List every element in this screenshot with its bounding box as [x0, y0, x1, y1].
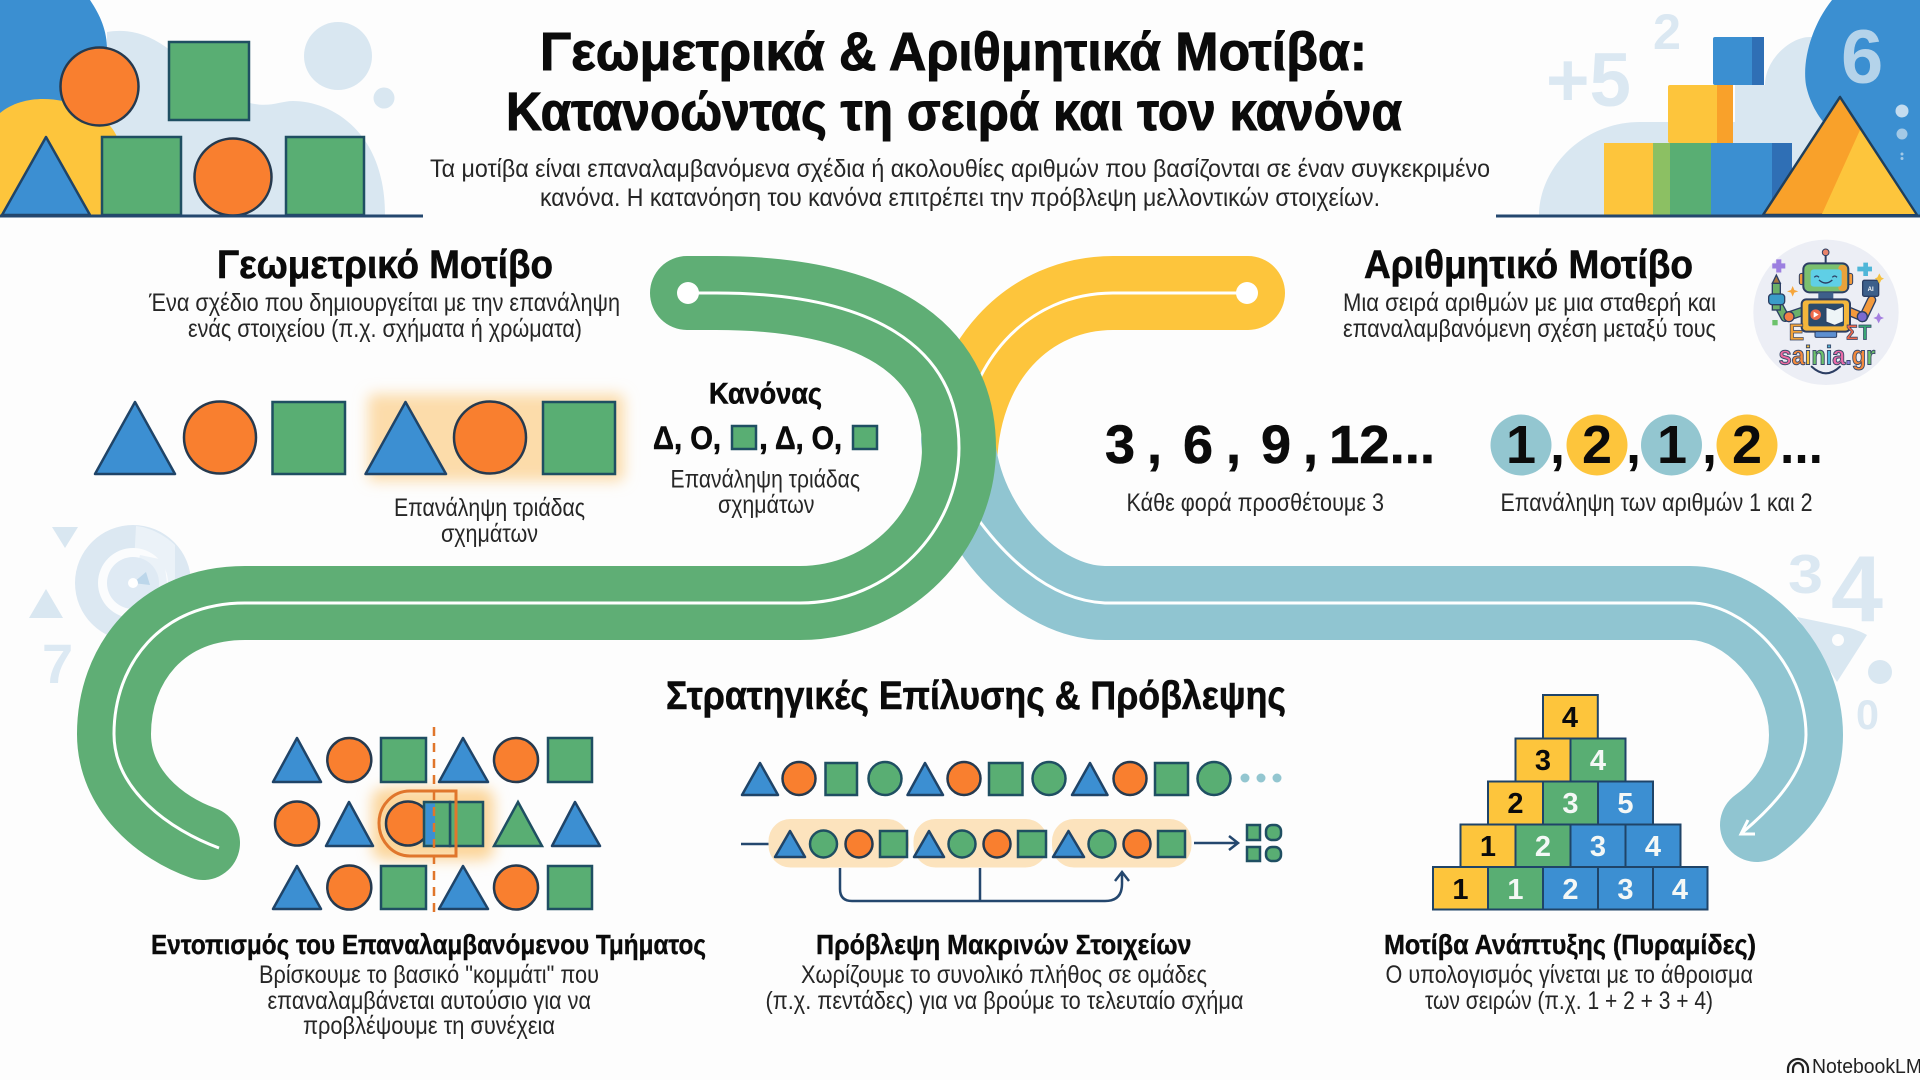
decoration: faded numbers right: 4	[1831, 536, 1883, 641]
sequence: repeating one two: 1	[1657, 415, 1687, 475]
heading: arithmetic pattern: Αριθμητικό Μοτίβο	[1364, 243, 1693, 287]
logo: robot sainia.gr: Τ	[1859, 320, 1871, 344]
chart: number pyramid: 3	[1562, 788, 1579, 820]
text: locate repeating segment: Βρίσκουμε το βασικό "κομμάτι" που	[259, 961, 599, 989]
logo: robot sainia.gr: Ε	[1789, 319, 1804, 345]
sequence: add three: 9	[1261, 415, 1291, 475]
intro text: κανόνα. Η κατανόηση του κανόνα επιτρέπει την πρόβλεψη μελλοντικών στοιχείων.	[540, 184, 1380, 212]
sequence: repeating one two: ,	[1550, 415, 1565, 475]
sequence: add three: ,	[1226, 415, 1241, 475]
chart: number pyramid: 4	[1672, 874, 1688, 906]
text: locate repeating segment	[151, 929, 706, 1040]
text: arithmetic description: Μια σειρά αριθμών με μια σταθερή και	[1343, 289, 1716, 317]
logo: robot sainia.gr: Σ	[1846, 320, 1858, 344]
chart: number pyramid: 4	[1645, 831, 1661, 863]
text: predicting far elements: Χωρίζουμε το συνολικό πλήθος σε ομάδες	[801, 961, 1207, 989]
figure: long sequence row	[742, 762, 1282, 795]
decoration: faded numbers right: 0	[1856, 691, 1879, 738]
track: yellow arithmetic path	[960, 282, 1258, 470]
text: arithmetic description	[1343, 289, 1716, 343]
rule block: Δ, Ο,	[775, 420, 842, 456]
caption: triad repetition	[394, 494, 585, 548]
text: predicting far elements: (π.χ. πεντάδες) για να βρούμε το τελευταίο σχήμα	[766, 987, 1244, 1015]
text: locate repeating segment: επαναλαμβάνεται αυτούσιο για να	[268, 987, 591, 1015]
chart: number pyramid	[1433, 695, 1708, 910]
sequence: repeating one two: ...	[1780, 415, 1823, 475]
text: arithmetic description: επαναλαμβανόμενη σχέση μεταξύ τους	[1343, 315, 1716, 343]
illustration: header blocks right: +5	[1546, 38, 1631, 123]
figure: shape grid with highlighted segment	[273, 727, 600, 918]
illustration: header blocks right: 6	[1841, 15, 1883, 100]
illustration: header shapes left	[0, 0, 423, 218]
caption: triad repetition: σχημάτων	[441, 520, 538, 548]
chart: number pyramid: 2	[1507, 788, 1524, 820]
chart: number pyramid: 2	[1562, 874, 1579, 906]
track: teal path with arrow	[958, 440, 1806, 834]
sequence: add three	[1105, 415, 1435, 475]
rule block	[653, 378, 877, 519]
sequence: add three: 12...	[1329, 415, 1435, 475]
sequence: add three: ,	[1147, 415, 1162, 475]
illustration: header blocks right	[1496, 0, 1920, 218]
rule block: ,	[759, 420, 768, 456]
geometric pattern row	[95, 394, 624, 481]
chart: number pyramid: 3	[1617, 874, 1634, 906]
rule block: σχημάτων	[718, 491, 814, 519]
caption: repeating one two: Επανάληψη των αριθμών 1 και 2	[1500, 489, 1812, 517]
text: predicting far elements	[766, 929, 1244, 1015]
decoration: faded numbers right	[1788, 536, 1892, 738]
caption: triad repetition: Επανάληψη τριάδας	[394, 494, 585, 522]
title: Γεωμετρικά & Αριθμητικά Μοτίβα:	[540, 22, 1367, 82]
title	[506, 22, 1402, 142]
chart: number pyramid: 5	[1617, 788, 1634, 820]
chart: number pyramid: 3	[1590, 831, 1606, 863]
illustration: header blocks right: 2	[1653, 4, 1681, 60]
heading: strategies: Στρατηγικές Επίλυσης & Πρόβλεψης	[666, 674, 1286, 718]
intro text: Τα μοτίβα είναι επαναλαμβανόμενα σχέδια ή ακολουθίες αριθμών που βασίζονται σε έναν συγκεκριμένο	[430, 155, 1490, 183]
rule block: Κανόνας	[709, 378, 822, 410]
chart: number pyramid: 4	[1562, 702, 1578, 734]
sequence: repeating one two: 2	[1732, 415, 1762, 475]
sequence: add three: 6	[1183, 415, 1213, 475]
chart: number pyramid: 3	[1535, 745, 1551, 777]
logo: robot sainia.gr: AI	[1868, 287, 1874, 293]
decoration: faded target left: 7	[42, 632, 73, 695]
decoration: faded numbers right: 3	[1788, 543, 1823, 605]
text: growth patterns: Ο υπολογισμός γίνεται με το άθροισμα	[1386, 961, 1753, 989]
chart: number pyramid: 4	[1590, 745, 1606, 777]
logo: robot sainia.gr	[1753, 240, 1899, 385]
text: growth patterns	[1384, 929, 1756, 1015]
chart: number pyramid: 1	[1452, 874, 1469, 906]
decoration: faded target left	[29, 525, 191, 695]
caption: add three: Κάθε φορά προσθέτουμε 3	[1126, 489, 1384, 517]
chart: number pyramid: 2	[1535, 831, 1551, 863]
figure: grouped sequence with bracket	[741, 819, 1281, 901]
text: predicting far elements: Πρόβλεψη Μακρινών Στοιχείων	[816, 929, 1192, 960]
text: geometric description: Ένα σχέδιο που δημιουργείται με την επανάληψη	[148, 289, 620, 317]
sequence: repeating one two: ,	[1626, 415, 1641, 475]
track: green geometric path	[114, 282, 959, 848]
rule block: Επανάληψη τριάδας	[670, 466, 860, 494]
sequence: repeating one two	[1490, 414, 1823, 476]
text: growth patterns: των σειρών (π.χ. 1 + 2 + 3 + 4)	[1425, 987, 1713, 1015]
title: Κατανοώντας τη σειρά και τον κανόνα	[506, 82, 1402, 142]
sequence: add three: ,	[1303, 415, 1318, 475]
heading: geometric pattern: Γεωμετρικό Μοτίβο	[217, 243, 553, 287]
text: geometric description	[148, 289, 620, 343]
logo: robot sainia.gr: sainia.gr	[1779, 341, 1875, 371]
text: locate repeating segment: Εντοπισμός του Επαναλαμβανόμενου Τμήματος	[151, 929, 706, 960]
text: geometric description: ενάς στοιχείου (π.χ. σχήματα ή χρώματα)	[188, 315, 582, 343]
intro text	[430, 155, 1490, 212]
sequence: repeating one two: ,	[1702, 415, 1717, 475]
sequence: add three: 3	[1105, 415, 1135, 475]
chart: number pyramid: 1	[1507, 874, 1524, 906]
sequence: repeating one two: 2	[1582, 415, 1612, 475]
text: locate repeating segment: προβλέψουμε τη συνέχεια	[303, 1012, 555, 1040]
text: growth patterns: Μοτίβα Ανάπτυξης (Πυραμίδες)	[1384, 929, 1756, 960]
rule block: Δ, Ο,	[653, 420, 721, 456]
sequence: repeating one two: 1	[1506, 415, 1536, 475]
chart: number pyramid: 1	[1480, 831, 1496, 863]
